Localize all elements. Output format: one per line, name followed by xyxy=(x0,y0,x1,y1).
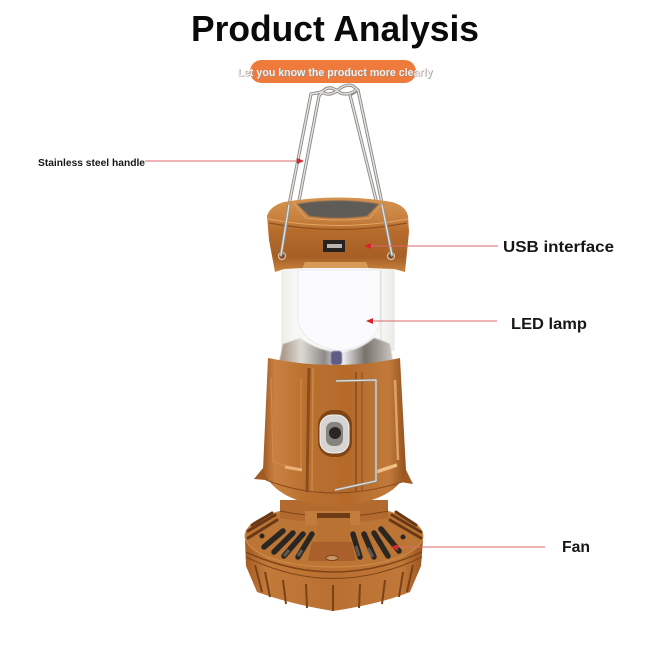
solar panel xyxy=(297,200,379,218)
handle lower ends over the cap xyxy=(281,205,392,255)
label: LED lamp: LED lamp xyxy=(511,316,587,333)
folding hinge and neck xyxy=(280,500,388,523)
label: Fan xyxy=(391,539,590,556)
lantern product illustration xyxy=(245,85,423,611)
side carry handle xyxy=(335,380,376,490)
main body xyxy=(254,358,413,507)
USB port xyxy=(323,240,345,252)
label: stainless steel handle: Stainless steel handle xyxy=(38,158,145,169)
subtitle pill: Let you know the product more clearly xyxy=(238,68,434,80)
label: USB interface: USB interface xyxy=(503,239,614,256)
label: USB interface xyxy=(364,239,614,256)
fan top grille xyxy=(245,505,423,567)
title: Product Analysis xyxy=(191,8,479,49)
subtitle pill: Let you know the product more clearly xyxy=(238,67,433,79)
body ribs xyxy=(266,368,402,493)
label: LED lamp xyxy=(366,316,587,333)
top cap xyxy=(267,198,409,272)
label: stainless steel handle xyxy=(38,158,304,169)
glass lamp chamber xyxy=(278,266,394,368)
LED diffuser dome xyxy=(298,270,380,351)
label: Fan: Fan xyxy=(562,539,590,556)
silver reflector xyxy=(278,338,394,368)
switch button xyxy=(318,410,352,457)
fan base xyxy=(245,500,423,611)
subtitle pill xyxy=(238,60,434,83)
icon: stainless steel wire handle xyxy=(288,85,383,210)
